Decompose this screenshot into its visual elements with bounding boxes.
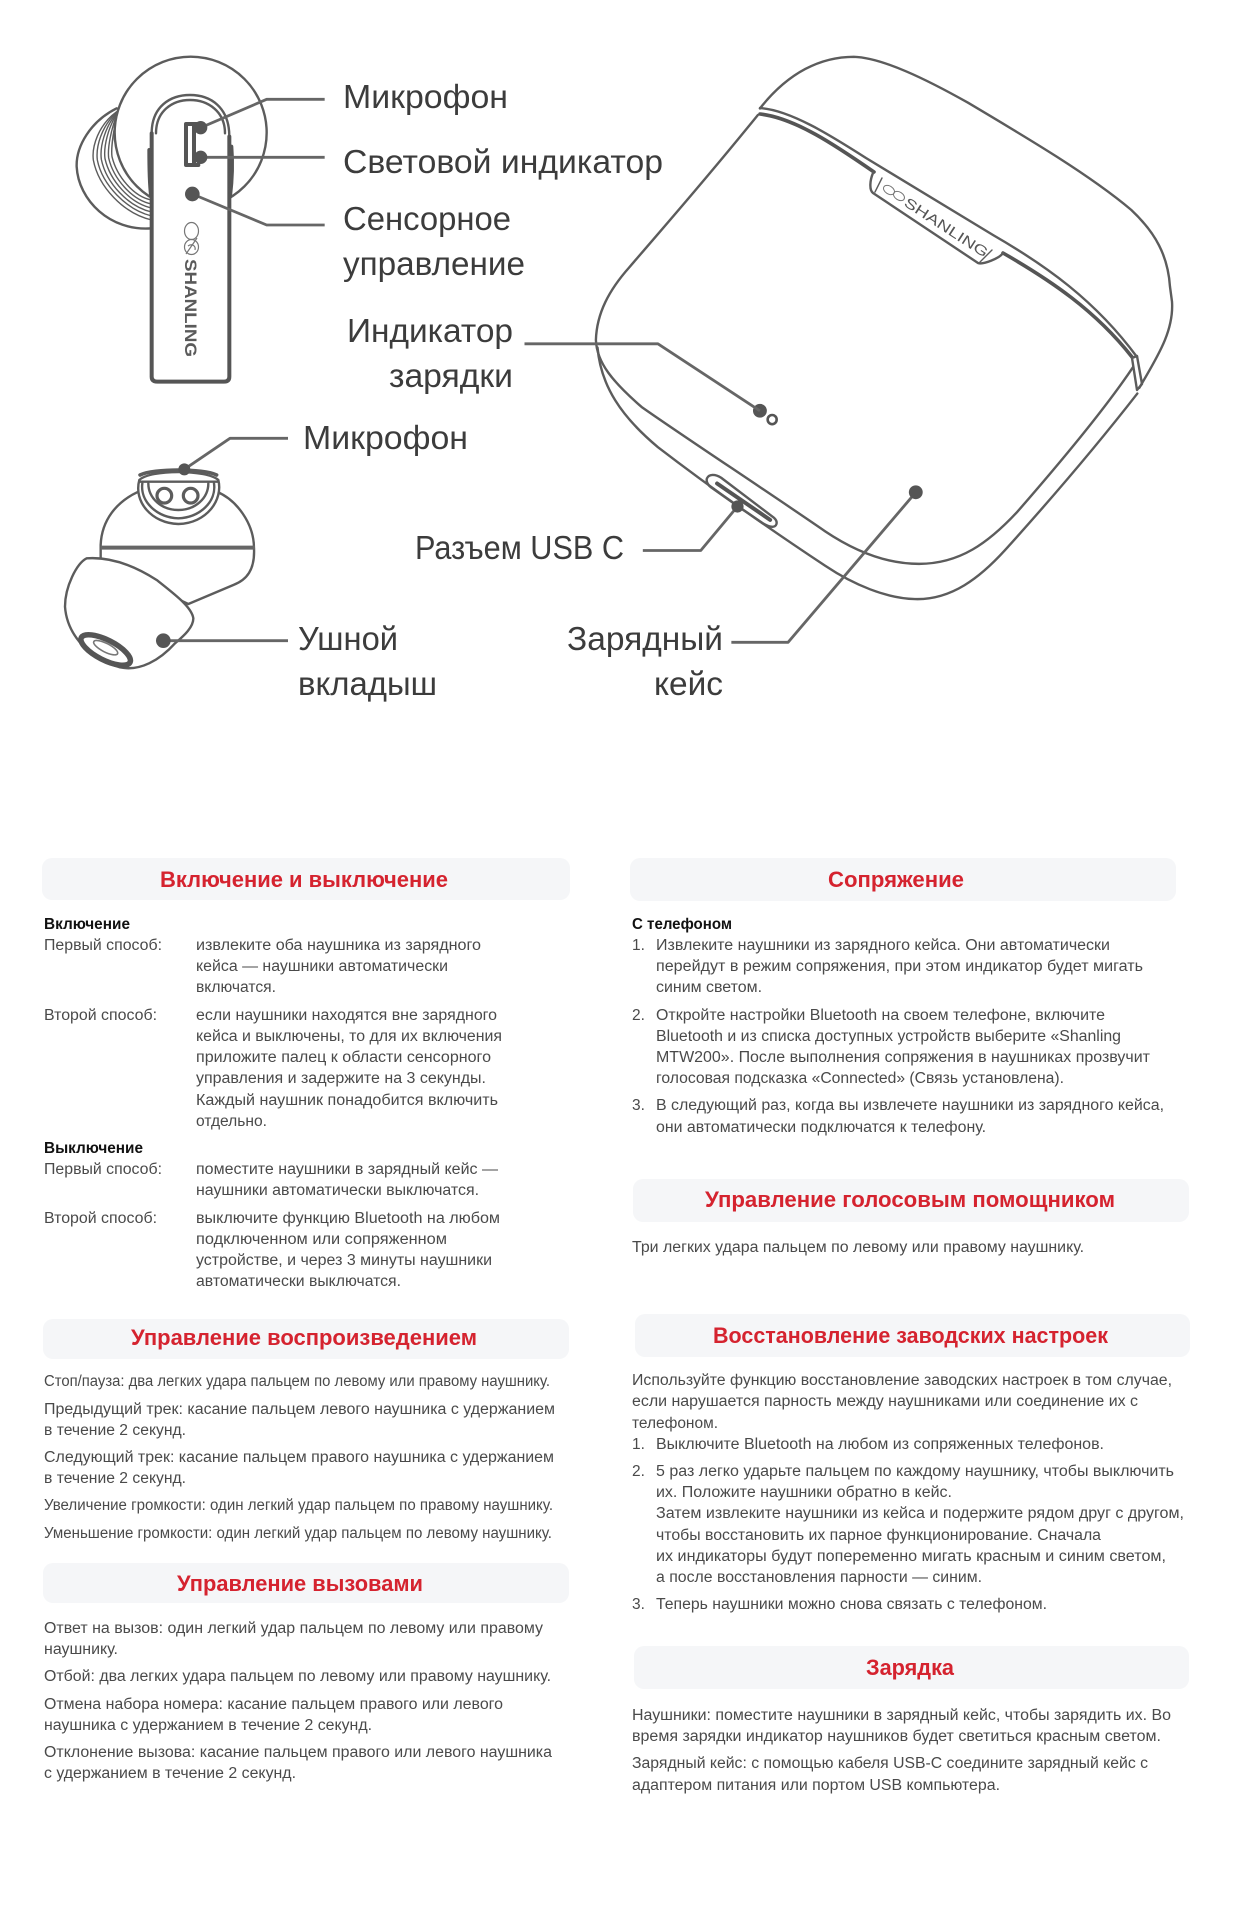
leaders: indicator, USB C, case [525, 344, 923, 642]
case lid seam [760, 108, 1142, 390]
list: pairing steps: Извлеките наушники из зарядного кейса. Они автоматически [656, 937, 1110, 954]
list: pairing steps: перейдут в режим сопряжения, при этом индикатор будет мигать [656, 958, 1143, 975]
list: reset steps [632, 1436, 1184, 1613]
subheading: off: Выключение [44, 1140, 143, 1157]
text: off methods: подключенном или сопряженном [196, 1231, 447, 1248]
heading: factory reset [635, 1314, 1190, 1357]
text: off methods: устройстве, и через 3 минуты наушники [196, 1252, 492, 1269]
heading: factory reset: Восстановление заводских настроек [713, 1323, 1109, 1348]
text: on methods: управления и задержите на 3 секунды. [196, 1070, 486, 1087]
text: playback: Уменьшение громкости: один легкий удар пальцем по левому наушнику. [44, 1525, 552, 1542]
text: reset intro: если нарушается парность между наушниками или соединение их с [632, 1393, 1138, 1410]
text: playback [44, 1373, 555, 1542]
list: reset steps: 3. [632, 1596, 645, 1613]
label: ear tip [298, 620, 437, 702]
list: pairing steps: голосовая подсказка «Connected» (Связь установлена). [656, 1070, 1064, 1087]
text: playback: в течение 2 секунд. [44, 1422, 186, 1439]
label: charge indicator [347, 312, 513, 394]
text: voice assistant: Три легких удара пальцем по левому или правому наушнику. [632, 1239, 1084, 1256]
text: charging: Зарядный кейс: с помощью кабеля USB-C соедините зарядный кейс с [632, 1755, 1148, 1772]
nozzle head [138, 470, 219, 524]
label: USB C: Разъем USB C [415, 529, 624, 566]
heading: voice assistant: Управление голосовым помощником [705, 1187, 1115, 1212]
text: off methods: наушники автоматически выключатся. [196, 1182, 479, 1199]
label: charge indicator: Индикатор [347, 312, 513, 349]
text: calls: Отмена набора номера: касание пальцем правого или левого [44, 1696, 503, 1713]
charge indicator holes [753, 404, 777, 424]
text: reset intro: телефоном. [632, 1415, 718, 1432]
panel: pairing [630, 858, 1176, 1136]
leader: ear tip [156, 633, 288, 648]
logo wordmark: SHANLING [901, 194, 991, 260]
text: playback: в течение 2 секунд. [44, 1470, 186, 1487]
heading: charging [634, 1646, 1189, 1689]
list: reset steps: 2. [632, 1463, 645, 1480]
heading: pairing: Сопряжение [828, 867, 964, 892]
list: reset steps: а после восстановления парности — синим. [656, 1569, 982, 1586]
logo mark [184, 222, 198, 254]
heading: pairing [630, 858, 1176, 901]
seam [101, 546, 255, 550]
text: calls: Ответ на вызов: один легкий удар пальцем по левому или правому [44, 1620, 543, 1637]
text: playback: Предыдущий трек: касание пальцем левого наушника с удержанием [44, 1401, 555, 1418]
label: touch control [343, 200, 525, 282]
text: calls: наушнику. [44, 1641, 118, 1658]
text: calls: Отбой: два легких удара пальцем по левому или правому наушнику. [44, 1668, 551, 1685]
text: on methods: приложите палец к области сенсорного [196, 1049, 491, 1066]
label: charging case [567, 620, 723, 702]
text: on methods: если наушники находятся вне зарядного [196, 1007, 497, 1024]
label: touch control: управление [343, 245, 525, 282]
list: pairing steps: 3. [632, 1097, 645, 1114]
label: charge indicator: зарядки [389, 357, 513, 394]
text: reset intro [632, 1372, 1172, 1432]
text: charging [632, 1707, 1171, 1794]
text: playback: Следующий трек: касание пальцем правого наушника с удержанием [44, 1449, 554, 1466]
list: pairing steps: 2. [632, 1007, 645, 1024]
text: playback: Увеличение громкости: один легкий удар пальцем по правому наушнику. [44, 1497, 553, 1514]
diagram: charging case [525, 57, 1172, 642]
text: calls: Отклонение вызова: касание пальцем правого или левого наушника [44, 1744, 552, 1761]
text: on methods: извлеките оба наушника из зарядного [196, 937, 481, 954]
list: pairing steps: Откройте настройки Bluetooth на своем телефоне, включите [656, 1007, 1105, 1024]
panel: playback control [43, 1319, 569, 1542]
text: calls [44, 1620, 552, 1782]
text: off methods: поместите наушники в зарядный кейс — [196, 1161, 499, 1178]
label: ear tip: Ушной [298, 620, 398, 657]
diagram: earbud side view [77, 57, 325, 382]
list: pairing steps: 1. [632, 937, 645, 954]
panel: voice assistant [632, 1179, 1189, 1256]
text: on methods: Первый способ: [44, 937, 162, 954]
list: reset steps: Выключите Bluetooth на любом из сопряженных телефонов. [656, 1436, 1104, 1453]
text: off methods: выключите функцию Bluetooth на любом [196, 1210, 500, 1227]
case lower edge [598, 348, 1137, 599]
text: on methods: отдельно. [196, 1113, 267, 1130]
earbud body [101, 492, 254, 604]
panel: call control [43, 1563, 569, 1782]
text: on methods [44, 937, 502, 1130]
text: charging: адаптером питания или портом USB компьютера. [632, 1777, 1000, 1794]
subheading: with phone: С телефоном [632, 916, 732, 933]
label: microphone: Микрофон [343, 78, 508, 115]
list: reset steps: их индикаторы будут попеременно мигать красным и синим светом, [656, 1548, 1166, 1565]
list: pairing steps: Bluetooth и из списка доступных устройств выберите «Shanling [656, 1028, 1121, 1045]
heading: charging: Зарядка [866, 1655, 955, 1680]
text: on methods: кейса — наушники автоматически [196, 958, 448, 975]
case logo tab [870, 173, 1003, 263]
text: on methods: Каждый наушник понадобится включить [196, 1092, 498, 1109]
leader: microphone [178, 438, 288, 475]
text: calls: с удержанием в течение 2 секунд. [44, 1765, 296, 1782]
list: pairing steps: В следующий раз, когда вы извлечете наушники из зарядного кейса, [656, 1097, 1164, 1114]
label: ear tip: вкладыш [298, 665, 437, 702]
heading: playback [43, 1319, 569, 1359]
list: reset steps: Затем извлеките наушники из кейса и подержите рядом друг с другом, [656, 1505, 1184, 1522]
ear tip [65, 558, 193, 671]
heading: power: Включение и выключение [160, 867, 448, 892]
heading: playback: Управление воспроизведением [131, 1325, 477, 1350]
case lid [760, 57, 1172, 388]
panel: power on and off [42, 858, 570, 1290]
text: calls: наушника с удержанием в течение 2 секунд. [44, 1717, 372, 1734]
text: off methods [44, 1161, 500, 1290]
text: off methods: автоматически выключатся. [196, 1273, 401, 1290]
text: on methods: включатся. [196, 979, 276, 996]
text: playback: Стоп/пауза: два легких удара пальцем по левому или правому наушнику. [44, 1373, 550, 1390]
text: charging: Наушники: поместите наушники в зарядный кейс, чтобы зарядить их. Во [632, 1707, 1171, 1724]
list: reset steps: 1. [632, 1436, 645, 1453]
leaders: microphone, light indicator, touch control [185, 99, 325, 225]
panel: factory reset [632, 1314, 1190, 1613]
heading: power [42, 858, 570, 900]
label: charging case: Зарядный [567, 620, 723, 657]
list: reset steps: 5 раз легко ударьте пальцем по каждому наушнику, чтобы выключить [656, 1463, 1174, 1480]
text: reset intro: Используйте функцию восстановление заводских настроек в том случае, [632, 1372, 1172, 1389]
list: pairing steps: синим светом. [656, 979, 762, 996]
label: microphone nozzle: Микрофон [303, 419, 468, 456]
heading: voice assistant [633, 1179, 1189, 1222]
diagram: earbud nozzle view [65, 438, 288, 671]
case top face [596, 115, 1133, 564]
list: reset steps: чтобы восстановить их парное функционирование. Сначала [656, 1527, 1101, 1544]
list: pairing steps: MTW200». После выполнения сопряжения в наушниках прозвучит [656, 1049, 1150, 1066]
panel: charging [632, 1646, 1189, 1794]
logo wordmark: SHANLING [181, 259, 200, 357]
subheading: on: Включение [44, 916, 130, 933]
heading: calls [43, 1563, 569, 1603]
earbud logo [181, 222, 200, 357]
list: reset steps: их. Положите наушники обратно в кейс. [656, 1484, 952, 1501]
light and microphone slot [186, 124, 198, 165]
USB C port [707, 475, 777, 527]
logo mark [882, 183, 906, 203]
text: on methods: кейса и выключены, то для их включения [196, 1028, 502, 1045]
label: charging case: кейс [654, 665, 723, 702]
label: touch control: Сенсорное [343, 200, 511, 237]
text: charging: время зарядки индикатор наушников будет светиться красным светом. [632, 1728, 1161, 1745]
list: reset steps: Теперь наушники можно снова связать с телефоном. [656, 1596, 1047, 1613]
earbud stem [149, 95, 232, 382]
label: light indicator: Световой индикатор [343, 143, 663, 180]
heading: calls: Управление вызовами [177, 1571, 423, 1596]
ear tip back with strands [77, 57, 267, 229]
text: off methods: Первый способ: [44, 1161, 162, 1178]
labels [298, 78, 723, 702]
list: pairing steps [632, 937, 1164, 1136]
text: on methods: Второй способ: [44, 1007, 157, 1024]
text: off methods: Второй способ: [44, 1210, 157, 1227]
list: pairing steps: они автоматически подключатся к телефону. [656, 1119, 986, 1136]
